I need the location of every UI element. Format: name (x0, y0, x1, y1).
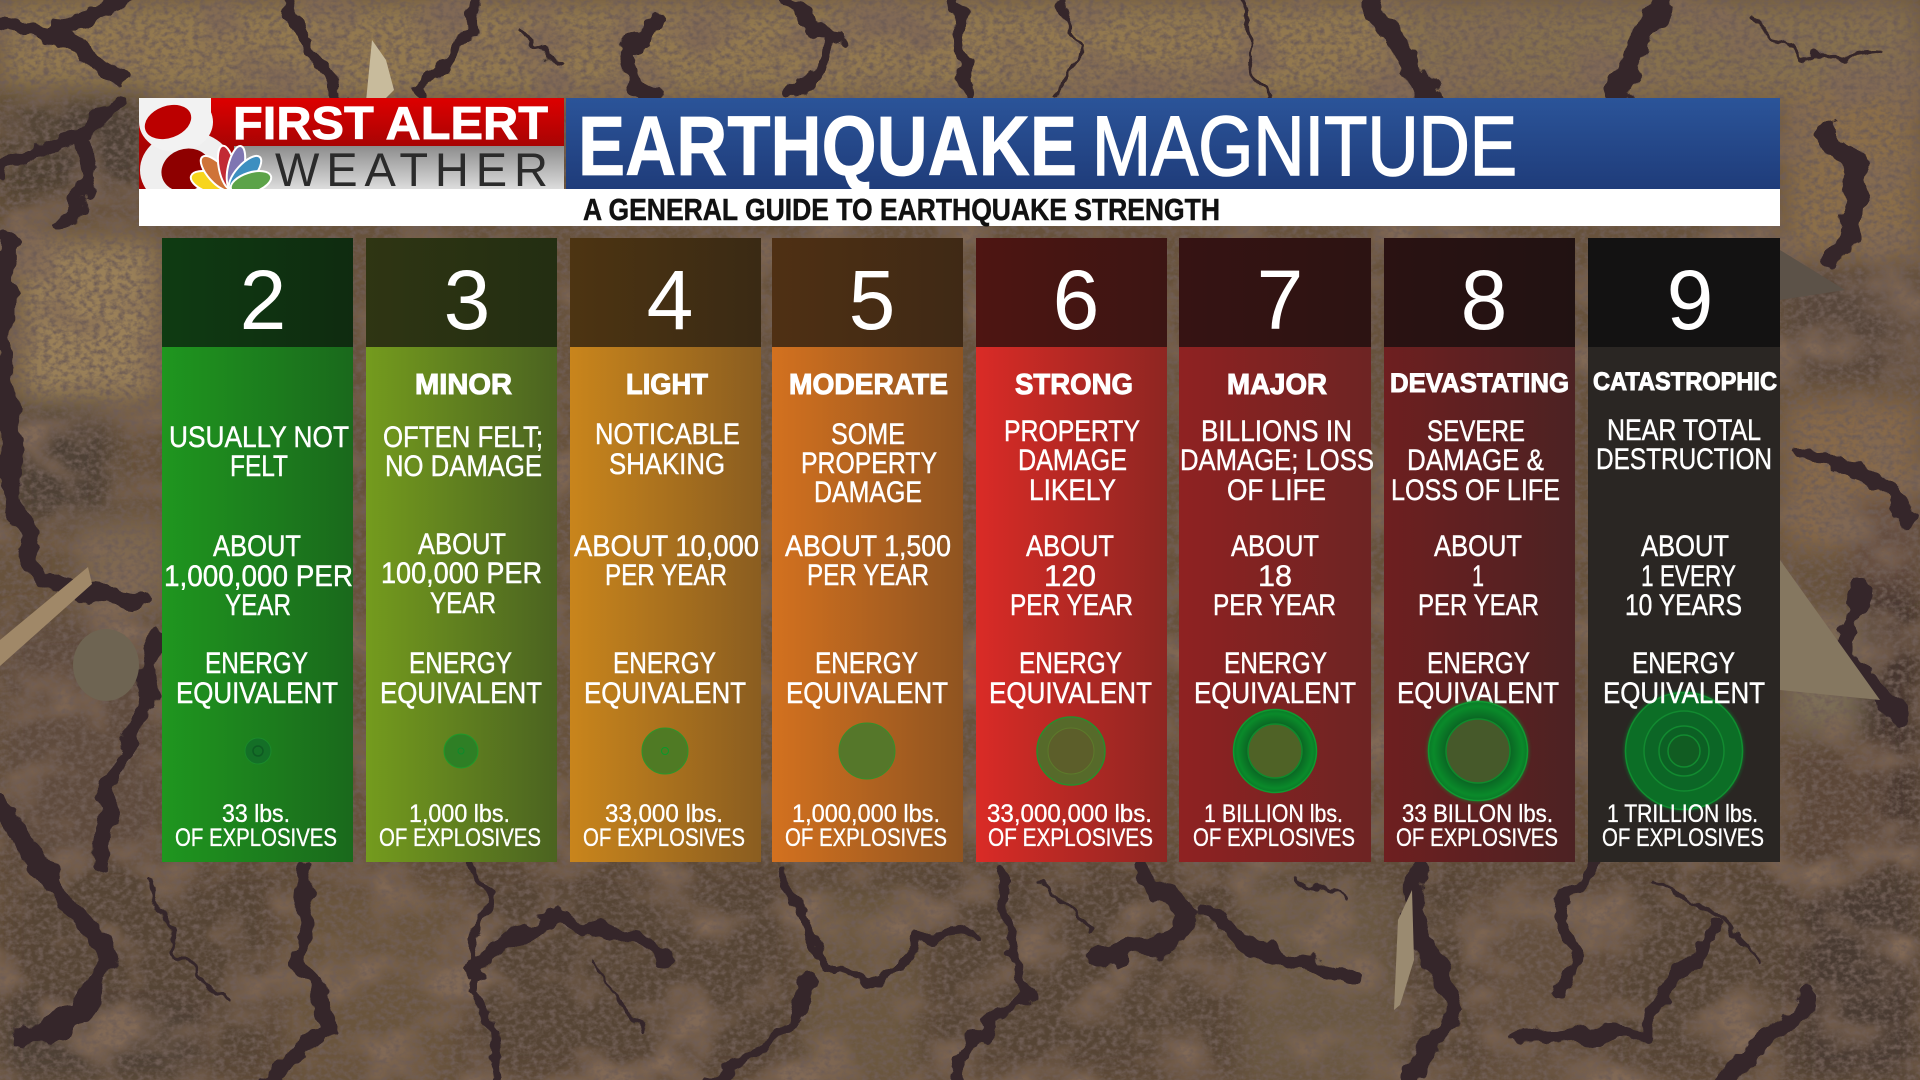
energy heading (1194, 647, 1356, 710)
frequency: 100,000 PER (381, 557, 542, 590)
description (383, 421, 543, 483)
frequency: ABOUT (1231, 530, 1319, 563)
energy heading: ENERGY (1427, 647, 1530, 680)
description (1596, 414, 1772, 476)
label: MODERATE (789, 369, 948, 401)
explosives amount (987, 800, 1153, 852)
description: NOTICABLE (595, 418, 740, 451)
explosives amount: 1,000,000 lbs. (792, 800, 940, 828)
panel: magnitude 2: 2 (240, 253, 286, 347)
panel: magnitude 9 (1588, 238, 1780, 862)
explosives amount: OF EXPLOSIVES (785, 824, 947, 852)
description: DAMAGE; LOSS (1180, 444, 1374, 477)
description: LOSS OF LIFE (1391, 474, 1560, 507)
panel: magnitude 7: 7 (1257, 253, 1303, 347)
energy heading: ENERGY (205, 647, 308, 680)
frequency: 120 (1044, 560, 1096, 593)
description (169, 421, 349, 483)
energy heading (176, 647, 338, 710)
explosives amount: 33 lbs. (222, 800, 290, 828)
energy heading (1603, 647, 1765, 710)
description: DAMAGE & (1407, 444, 1544, 477)
title: EARTHQUAKE (578, 99, 1077, 193)
description: FELT (230, 450, 288, 483)
explosives amount: 1,000 lbs. (409, 800, 510, 828)
energy heading: ENERGY (613, 647, 716, 680)
frequency: ABOUT 10,000 (574, 530, 759, 563)
frequency: ABOUT (213, 530, 301, 563)
label: MAJOR (1227, 369, 1327, 401)
frequency: PER YEAR (605, 559, 727, 592)
energy heading: EQUIVALENT (989, 677, 1152, 710)
circle: energy size (839, 723, 895, 779)
circle: energy size (1234, 710, 1316, 792)
frequency (574, 530, 759, 592)
description: SHAKING (609, 448, 725, 481)
frequency: ABOUT (1026, 530, 1114, 563)
panel: magnitude 7 (1179, 238, 1374, 862)
explosives amount (379, 800, 541, 852)
energy heading (786, 647, 948, 710)
logo: First Alert Weather (139, 98, 564, 189)
label: STRONG (1015, 369, 1133, 401)
panel: magnitude 9: 9 (1667, 253, 1713, 347)
explosives amount: 1 TRILLION lbs. (1607, 800, 1758, 828)
description: SOME (831, 418, 905, 451)
frequency (1213, 530, 1336, 622)
frequency: 10 YEARS (1625, 589, 1742, 622)
explosives amount: 33,000 lbs. (605, 800, 723, 828)
energy heading (584, 647, 746, 710)
description: SEVERE (1427, 415, 1525, 448)
frequency: 1 (1472, 560, 1484, 593)
explosives amount (785, 800, 947, 852)
panel: magnitude 2 (162, 238, 353, 862)
description (595, 418, 740, 481)
panel: magnitude 3: 3 (444, 253, 490, 347)
logo: First Alert Weather: WEATHER (275, 143, 548, 196)
frequency (785, 530, 951, 592)
energy heading (1397, 647, 1559, 710)
frequency: YEAR (430, 587, 496, 620)
frequency: YEAR (225, 589, 291, 622)
description: LIKELY (1029, 474, 1116, 507)
energy heading (989, 647, 1152, 710)
explosives amount: OF EXPLOSIVES (175, 824, 337, 852)
explosives amount (583, 800, 745, 852)
description: DAMAGE (814, 476, 922, 509)
description: OFTEN FELT; (383, 421, 543, 454)
frequency: 1 EVERY (1641, 560, 1736, 593)
header banner (139, 92, 1780, 227)
explosives amount: 1 BILLION lbs. (1204, 800, 1343, 828)
frequency: PER YEAR (1213, 589, 1336, 622)
energy heading: EQUIVALENT (786, 677, 948, 710)
energy heading: ENERGY (1632, 647, 1735, 680)
circle: energy size (642, 728, 688, 774)
energy heading: ENERGY (815, 647, 918, 680)
description: PROPERTY (801, 447, 937, 480)
panel: magnitude 8 (1384, 238, 1575, 862)
energy heading: ENERGY (1224, 647, 1327, 680)
explosives amount: 33 BILLON lbs. (1402, 800, 1553, 828)
explosives amount (1193, 800, 1355, 852)
panel: magnitude 6: 6 (1053, 253, 1099, 347)
explosives amount (1602, 800, 1764, 852)
frequency: PER YEAR (1418, 589, 1539, 622)
explosives amount: OF EXPLOSIVES (1602, 824, 1764, 852)
description: DAMAGE (1018, 444, 1127, 477)
panel: magnitude 5: 5 (849, 253, 895, 347)
frequency (1010, 530, 1133, 622)
label: LIGHT (626, 369, 708, 401)
explosives amount: OF EXPLOSIVES (988, 824, 1153, 852)
energy heading: EQUIVALENT (176, 677, 338, 710)
frequency: ABOUT (1641, 530, 1729, 563)
subtitle: A GENERAL GUIDE TO EARTHQUAKE STRENGTH (583, 192, 1220, 227)
explosives amount (1396, 800, 1558, 852)
label: MINOR (415, 369, 512, 401)
explosives amount: OF EXPLOSIVES (1193, 824, 1355, 852)
description: BILLIONS IN (1201, 415, 1352, 448)
explosives amount: OF EXPLOSIVES (1396, 824, 1558, 852)
energy heading: ENERGY (409, 647, 512, 680)
description (1180, 415, 1374, 507)
circle: energy size (1037, 717, 1105, 785)
panel: magnitude 4: 4 (647, 253, 693, 347)
frequency (1625, 530, 1742, 622)
energy heading (380, 647, 542, 710)
circle: energy size (1427, 700, 1529, 802)
frequency: PER YEAR (1010, 589, 1133, 622)
description: PROPERTY (1004, 415, 1140, 448)
frequency (1418, 530, 1539, 622)
frequency: PER YEAR (807, 559, 929, 592)
description: DESTRUCTION (1596, 443, 1772, 476)
panel: magnitude 3 (366, 238, 557, 862)
energy heading: EQUIVALENT (1397, 677, 1559, 710)
description: OF LIFE (1227, 474, 1326, 507)
explosives amount: OF EXPLOSIVES (379, 824, 541, 852)
panel: magnitude 5 (772, 238, 963, 862)
label: DEVASTATING (1390, 368, 1569, 398)
description (801, 418, 937, 509)
energy heading: ENERGY (1019, 647, 1122, 680)
panel: magnitude 8: 8 (1461, 253, 1507, 347)
circle: energy size (1624, 691, 1744, 811)
description (1004, 415, 1140, 507)
frequency: ABOUT (418, 528, 506, 561)
blue title bar (566, 98, 1780, 189)
energy heading: EQUIVALENT (584, 677, 746, 710)
explosives amount (175, 800, 337, 852)
description: NEAR TOTAL (1607, 414, 1761, 447)
frequency: ABOUT (1434, 530, 1522, 563)
white subtitle bar (139, 189, 1780, 226)
circle: energy size (245, 738, 271, 764)
frequency (164, 530, 353, 622)
energy heading: EQUIVALENT (1194, 677, 1356, 710)
frequency: 1,000,000 PER (164, 560, 353, 593)
energy heading: EQUIVALENT (1603, 677, 1765, 710)
energy heading: EQUIVALENT (380, 677, 542, 710)
panel: magnitude 6 (976, 238, 1167, 862)
title second word: MAGNITUDE (1092, 99, 1517, 193)
frequency: ABOUT 1,500 (785, 530, 951, 563)
label: CATASTROPHIC (1593, 368, 1777, 396)
circle: energy size (444, 734, 478, 768)
panel: magnitude 4 (570, 238, 761, 862)
description (1391, 415, 1560, 507)
description: NO DAMAGE (385, 450, 542, 483)
frequency: 18 (1258, 560, 1292, 593)
description: USUALLY NOT (169, 421, 349, 454)
explosives amount: 33,000,000 lbs. (987, 800, 1152, 828)
frequency (381, 528, 542, 620)
logo: First Alert Weather: FIRST ALERT (233, 97, 548, 149)
explosives amount: OF EXPLOSIVES (583, 824, 745, 852)
